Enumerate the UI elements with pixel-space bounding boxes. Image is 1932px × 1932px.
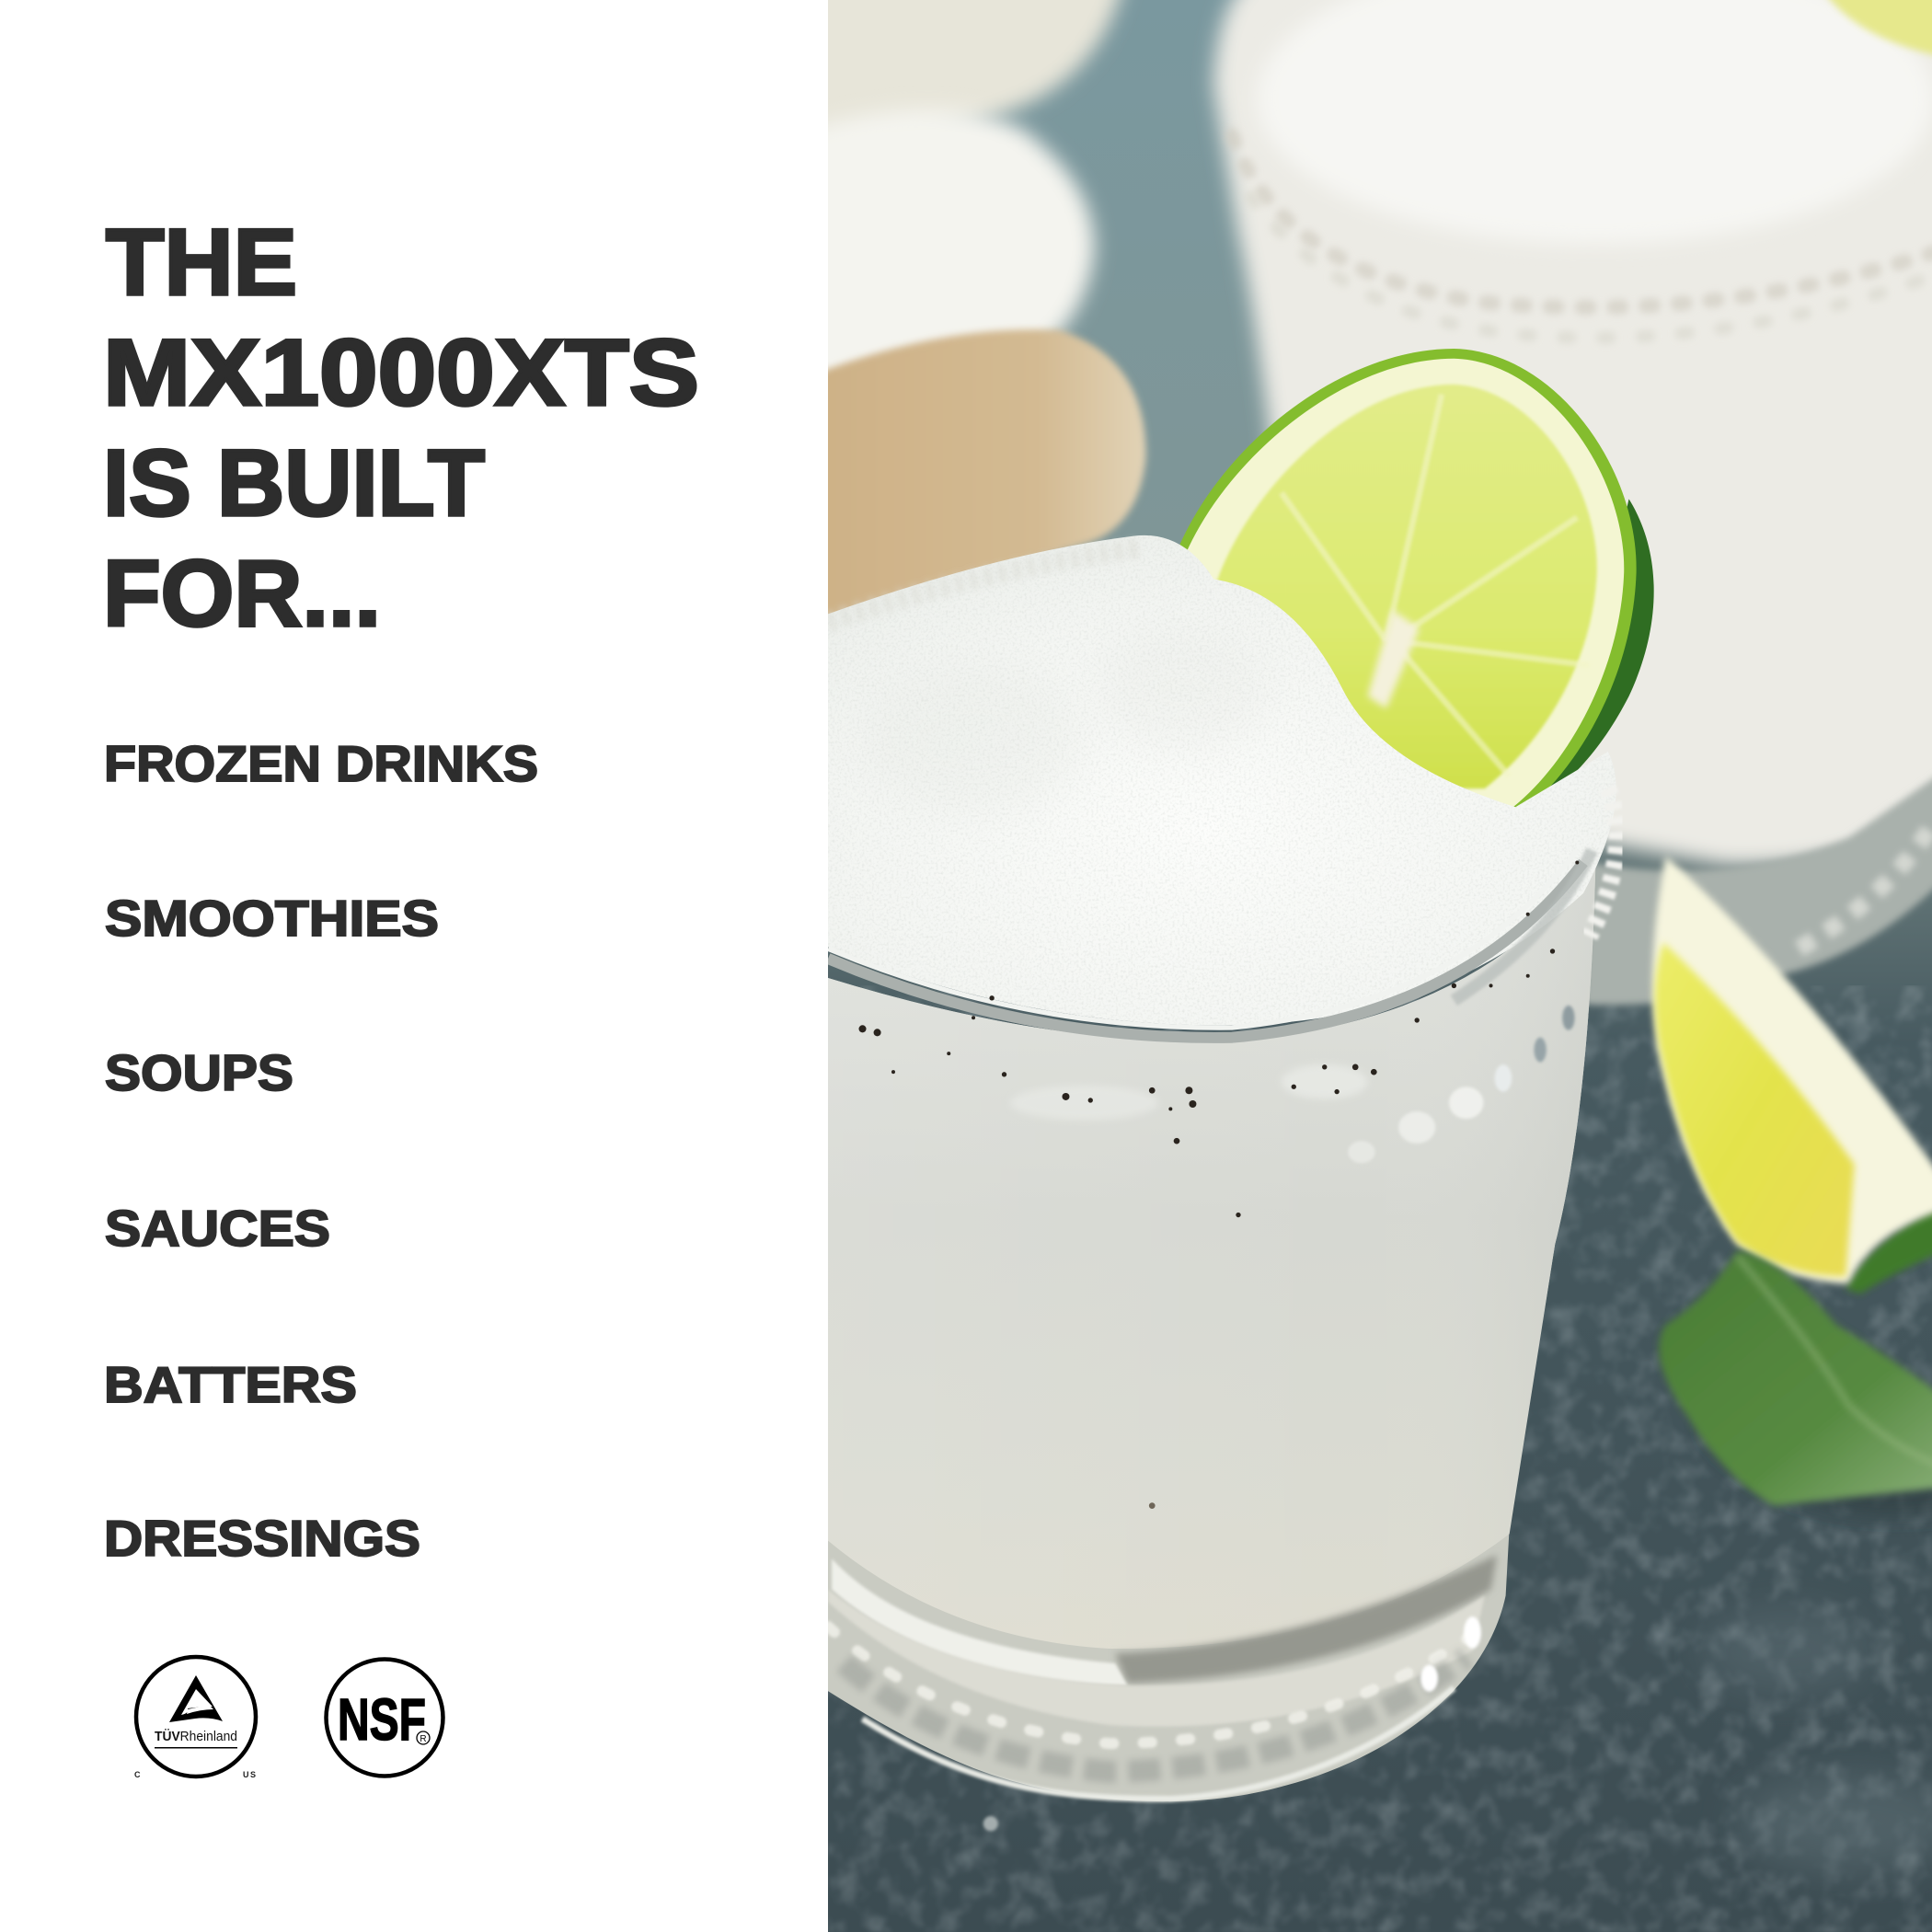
stray salt crystal [983, 1816, 998, 1831]
icon: NSF certification mark: R [420, 1734, 427, 1744]
list item: dressings: DRESSINGS [104, 1510, 420, 1567]
use-case list [104, 735, 538, 1567]
glass rim with salt [828, 788, 1617, 1120]
icon: TUV Rheinland certification mark: TÜVRheinland [155, 1729, 237, 1744]
icon: TUV Rheinland certification mark: US [243, 1770, 258, 1779]
front glass body and base [813, 863, 1595, 1801]
slate table background [828, 0, 1932, 1932]
list item: sauces: SAUCES [105, 1200, 330, 1257]
white background panel [0, 0, 828, 1932]
title: FOR... [103, 541, 381, 646]
list item: soups: SOUPS [105, 1044, 293, 1101]
panel: margarita photo [788, 0, 1932, 1932]
mint leaf [1659, 1250, 1932, 1516]
glass base details [828, 1555, 1497, 1799]
title: MX1000XTS [103, 320, 699, 425]
title [103, 210, 699, 646]
icon: NSF certification mark: NSF [338, 1686, 426, 1753]
icon: NSF certification mark [326, 1660, 443, 1776]
lime slice on back glass [1821, 0, 1932, 62]
frozen ice mound [788, 530, 1616, 1035]
pepper flecks [858, 860, 1579, 1509]
back glass, blurred [1213, 0, 1932, 1005]
glass bead row [1348, 1006, 1575, 1163]
lime slice on front glass [1165, 349, 1654, 813]
list item: batters: BATTERS [104, 1356, 357, 1413]
ceramic dish, blurred [828, 0, 1132, 138]
title: IS BUILT [103, 431, 485, 535]
wooden muddler [828, 325, 1150, 615]
white egg shape, blurred [828, 107, 1108, 374]
title: THE [106, 210, 297, 315]
lime wedge [1652, 857, 1932, 1294]
list item: smoothies: SMOOTHIES [105, 890, 439, 947]
list item: frozen drinks: FROZEN DRINKS [104, 735, 538, 792]
icon: TUV Rheinland certification mark [134, 1657, 258, 1779]
icon: TUV Rheinland certification mark: C [134, 1770, 141, 1779]
